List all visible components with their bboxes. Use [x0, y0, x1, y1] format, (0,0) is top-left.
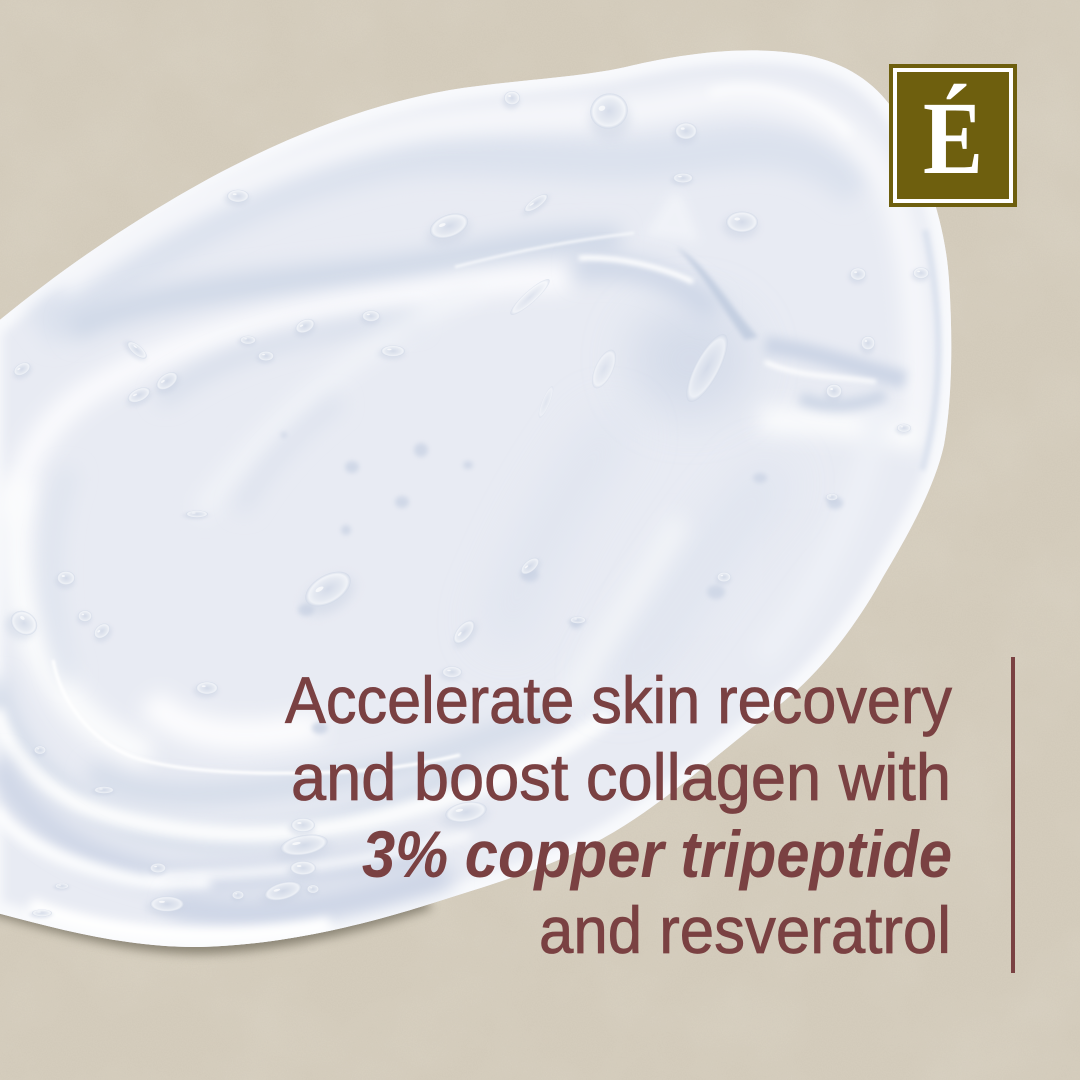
swatch ripples and highlights — [0, 50, 951, 947]
swatch drop shadow — [0, 895, 433, 954]
gel swatch — [0, 50, 951, 954]
swatch body — [0, 50, 951, 947]
main white arc — [12, 279, 570, 520]
elongated bubbles — [507, 275, 735, 419]
headline: and boost collagen with — [291, 740, 951, 814]
upper basin — [40, 148, 860, 330]
central ridge — [663, 207, 684, 230]
vertical accent rule — [1011, 657, 1015, 973]
lower arcs — [150, 700, 320, 735]
headline: and resveratrol — [539, 893, 951, 967]
headline: Accelerate skin recovery — [285, 663, 952, 737]
centre and right soft shading — [630, 305, 750, 415]
soft shadow spots — [281, 432, 843, 734]
left vertical band — [16, 480, 150, 755]
logo letter: É — [923, 81, 983, 196]
logo badge — [889, 64, 1017, 207]
headline: 3% copper tripeptide — [362, 817, 952, 891]
headline — [285, 663, 952, 967]
long blue streak — [70, 240, 620, 330]
gel bubbles — [0, 88, 929, 918]
